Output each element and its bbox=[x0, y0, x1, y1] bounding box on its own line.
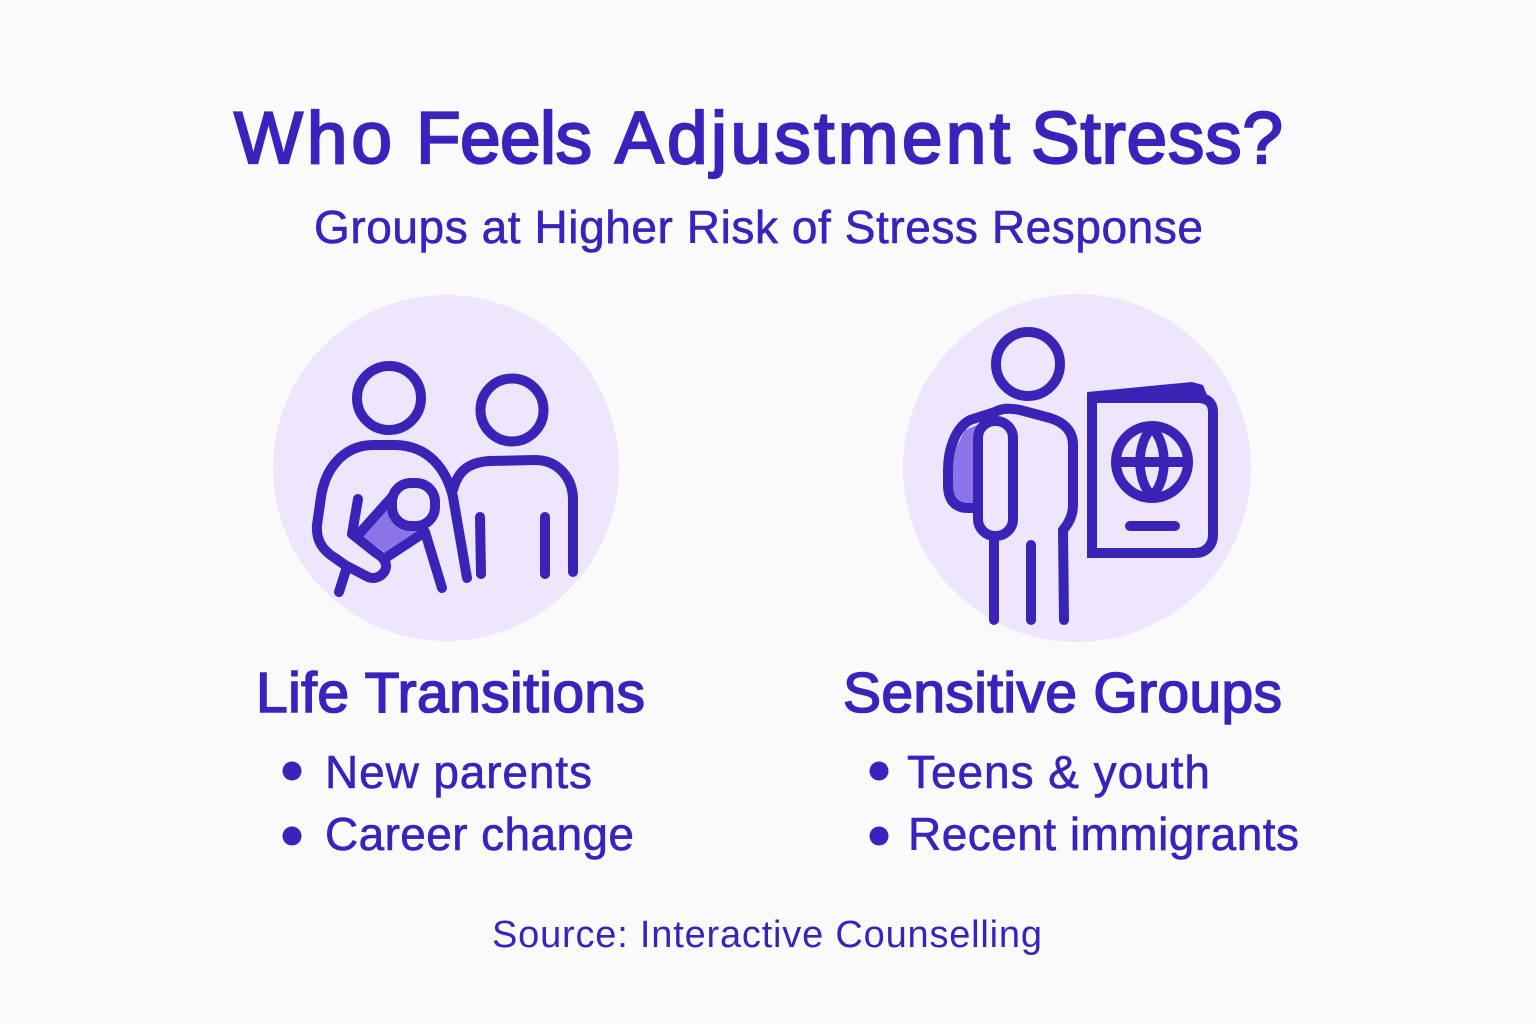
source note: Source: Interactive Counselling bbox=[492, 914, 1042, 956]
title: Stress? bbox=[1031, 98, 1283, 179]
title: Feels bbox=[416, 98, 592, 179]
list: sensitive groups: Recent immigrants bbox=[908, 808, 1299, 860]
icon: new parents with baby bbox=[273, 295, 619, 641]
list: sensitive groups bbox=[870, 746, 1299, 860]
list: life transitions: New parents bbox=[325, 746, 592, 798]
panel: sensitive groups bbox=[843, 294, 1299, 860]
title: Adjustment bbox=[615, 98, 1010, 179]
panel: life transitions bbox=[256, 295, 645, 860]
list: sensitive groups: Teens & youth bbox=[907, 746, 1210, 798]
title: Who bbox=[234, 98, 392, 179]
icon: traveller with backpack and passport bbox=[903, 294, 1251, 642]
subtitle: Groups at Higher Risk of Stress Response bbox=[314, 201, 1203, 253]
title bbox=[234, 98, 1283, 179]
list: life transitions: Career change bbox=[325, 808, 634, 860]
list: life transitions bbox=[282, 746, 634, 860]
heading: sensitive groups: Sensitive Groups bbox=[843, 661, 1282, 725]
heading: life transitions: Life Transitions bbox=[256, 661, 645, 725]
passport bbox=[1087, 382, 1213, 553]
